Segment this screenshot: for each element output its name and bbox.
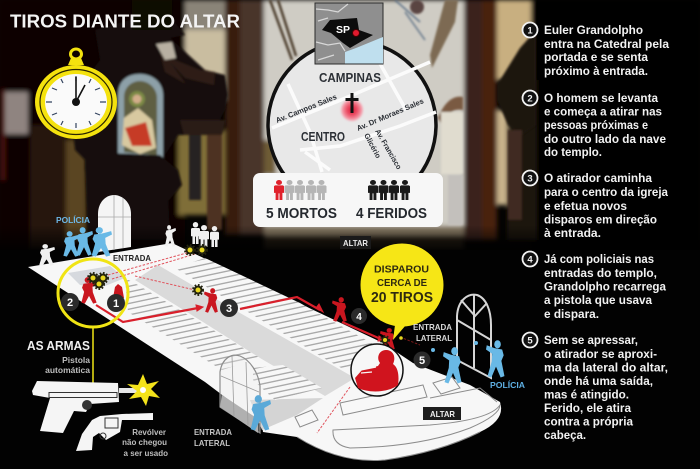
right carved capital [497, 30, 536, 135]
text block: step 3: à entrada. [544, 228, 601, 240]
text block: step 5: mas é atingido. [544, 390, 629, 402]
icon: revolver [76, 413, 153, 451]
label: altar (plan) [423, 407, 461, 420]
text block: step 4 [522, 252, 667, 321]
police at side door (right) [431, 340, 504, 384]
text block: step 5: o atirador se aproxi- [544, 349, 657, 361]
text block: step 2: do templo. [544, 147, 602, 159]
text block: step 5: 5 [527, 336, 533, 346]
text block: step 4: Já com policiais nas [544, 254, 654, 266]
callout: about 20 shots: 20 TIROS [371, 289, 433, 306]
icons: four wounded [368, 180, 410, 200]
label: altar (background): ALTAR [343, 238, 368, 248]
pews: left block [125, 278, 260, 370]
label: revolver not used: não chegou [122, 438, 167, 447]
map: Campinas city centre [268, 41, 436, 209]
label: pistola automática [45, 355, 90, 375]
text block: step 1: entra na Catedral pela [544, 39, 670, 51]
label: as armas [27, 338, 90, 375]
text block: step 5: Sem se apressar, [544, 335, 638, 347]
icon: pocket watch at about 1 o'clock [35, 49, 117, 139]
streets [272, 60, 436, 172]
label: revolver not used [122, 428, 168, 458]
icon: muzzle flash [127, 374, 160, 406]
label: entrada lateral (right): ENTRADA [413, 322, 452, 332]
number badges on the plan: 5 [419, 355, 425, 367]
callout: about 20 shots: CERCA DE [377, 278, 427, 289]
text block: step 4: entradas do templo, [544, 268, 657, 280]
label: 4 feridos: 4 FERIDOS [356, 206, 427, 222]
text block: step 4: e dispara. [544, 309, 599, 321]
main altar piece [70, 10, 228, 240]
inset: shooter firing at own head [351, 344, 403, 396]
icon: automatic pistol [32, 374, 160, 433]
floor plan of the cathedral [28, 243, 501, 461]
text block: step 4: 4 [527, 254, 533, 266]
label: altar (plan): ALTAR [430, 409, 455, 419]
map label: Av. Dr Moraes Sales: Av. Dr Moraes Sales [355, 96, 425, 133]
text block: step 5 [522, 332, 668, 442]
door: main entrance [98, 195, 131, 252]
text block: step 3 [522, 170, 669, 240]
inset label: SP: SP [336, 24, 350, 36]
text block: step 2: 2 [527, 94, 533, 104]
text block: step 3: O atirador caminha [544, 173, 653, 185]
shooter: scene 2 [81, 277, 98, 304]
pews: right block [175, 258, 375, 370]
lower aisle [250, 398, 323, 430]
icon: cathedral location marker [341, 93, 363, 121]
door: side entrance (right) [457, 295, 491, 378]
label: pistola automática: automática [45, 365, 90, 375]
panel: casualties [253, 173, 443, 227]
number badges on the plan: 3 [226, 303, 232, 315]
text block: step 1: portada e se senta [544, 52, 649, 64]
red shooter figures [81, 277, 395, 350]
label: revolver not used: a ser usado [124, 449, 168, 458]
shooter: scene 5 [380, 328, 395, 350]
map label: Av. Francisco Glicério: Glicério [362, 132, 383, 160]
shots: dashed trajectories [108, 252, 420, 433]
map label: Av. Francisco Glicério [362, 128, 404, 171]
number badges on the plan: 2 [67, 297, 73, 309]
label: polícia (right): POLÍCIA [490, 380, 525, 390]
text block: step 5: ma da lateral do altar, [544, 362, 668, 374]
text block: step 4: a pistola que usava [544, 295, 653, 307]
shooter: scene 1 seated [113, 284, 124, 298]
map label: Campinas: CAMPINAS [319, 71, 381, 85]
text block: step 1: 1 [527, 26, 533, 36]
shooter: scene 3 [204, 288, 218, 313]
text block: step 4: Grandolpho recarrega [544, 282, 667, 294]
number badges on the plan [61, 293, 430, 368]
number badges on the plan: 1 [113, 298, 119, 310]
text block: step 2: O homem se levanta [544, 93, 659, 105]
text block: step 5: onde há uma saída, [544, 376, 653, 388]
side door: lower entrance [220, 355, 260, 433]
text block: step 1: próximo à entrada. [544, 66, 648, 78]
niche with statue [118, 74, 163, 158]
text block: step 5: contra a própria [544, 416, 634, 428]
text block: step 1 [522, 22, 670, 78]
label: entrada: ENTRADA [113, 253, 151, 263]
label: revolver not used: Revólver [132, 428, 166, 437]
pews: lower block [253, 365, 322, 400]
text block: step 3: para o centro da igreja [544, 187, 669, 199]
text block: step 1: Euler Grandolpho [544, 25, 643, 37]
text block: step 3: e efetua novos [544, 201, 627, 213]
text block: step 5: cabeça. [544, 430, 586, 442]
label: pistola automática: Pistola [62, 355, 90, 365]
muzzle blasts [88, 246, 388, 344]
text block: step 3: disparos em direção [544, 214, 657, 226]
label: entrada lateral (left): LATERAL [194, 438, 230, 448]
label: entrada lateral (right): LATERAL [416, 333, 452, 343]
police at main entrance [63, 227, 112, 257]
number badges on the plan: 4 [356, 312, 362, 323]
label: entrada lateral (left) [194, 427, 232, 448]
callout: about 20 shots [360, 244, 444, 340]
inset map: São Paulo state [315, 3, 383, 64]
map label: Av. Francisco Glicério: Av. Francisco [373, 128, 404, 171]
shooter: scene 4 [332, 297, 347, 322]
text block: step 2: do outro lado da nave [544, 134, 666, 146]
map label: Centro: CENTRO [301, 130, 345, 144]
police at lower door [251, 395, 271, 431]
yellow circle: zoom on first scene [58, 259, 128, 390]
text block: step 3: 3 [527, 174, 533, 184]
red path of the shooter [96, 297, 386, 341]
label: entrada lateral (left): ENTRADA [194, 427, 232, 437]
label: altar (background) [340, 236, 371, 249]
icons: five dead, one red [274, 180, 326, 200]
altar steps [295, 377, 500, 461]
callout: about 20 shots: DISPAROU [374, 264, 429, 276]
label: 5 mortos: 5 MORTOS [266, 206, 337, 222]
text block: step 2 [522, 90, 666, 159]
map label: Av. Campos Sales: Av. Campos Sales [274, 92, 338, 125]
label: as armas: AS ARMAS [27, 338, 90, 353]
text block: step 2: pessoas próximas e [544, 120, 648, 132]
central aisle [135, 265, 355, 396]
title: TIROS DIANTE DO ALTAR [10, 12, 240, 32]
ribs of the vault [270, 0, 296, 60]
text block: step 2: e começa a atirar nas [544, 106, 662, 118]
label: polícia (top): POLÍCIA [56, 216, 90, 225]
grey patch at the entrance [68, 266, 125, 288]
white witnesses at entrance [39, 222, 219, 266]
text block: step 5: Ferido, ele atira [544, 403, 632, 415]
label: entrada lateral (right) [413, 322, 452, 343]
